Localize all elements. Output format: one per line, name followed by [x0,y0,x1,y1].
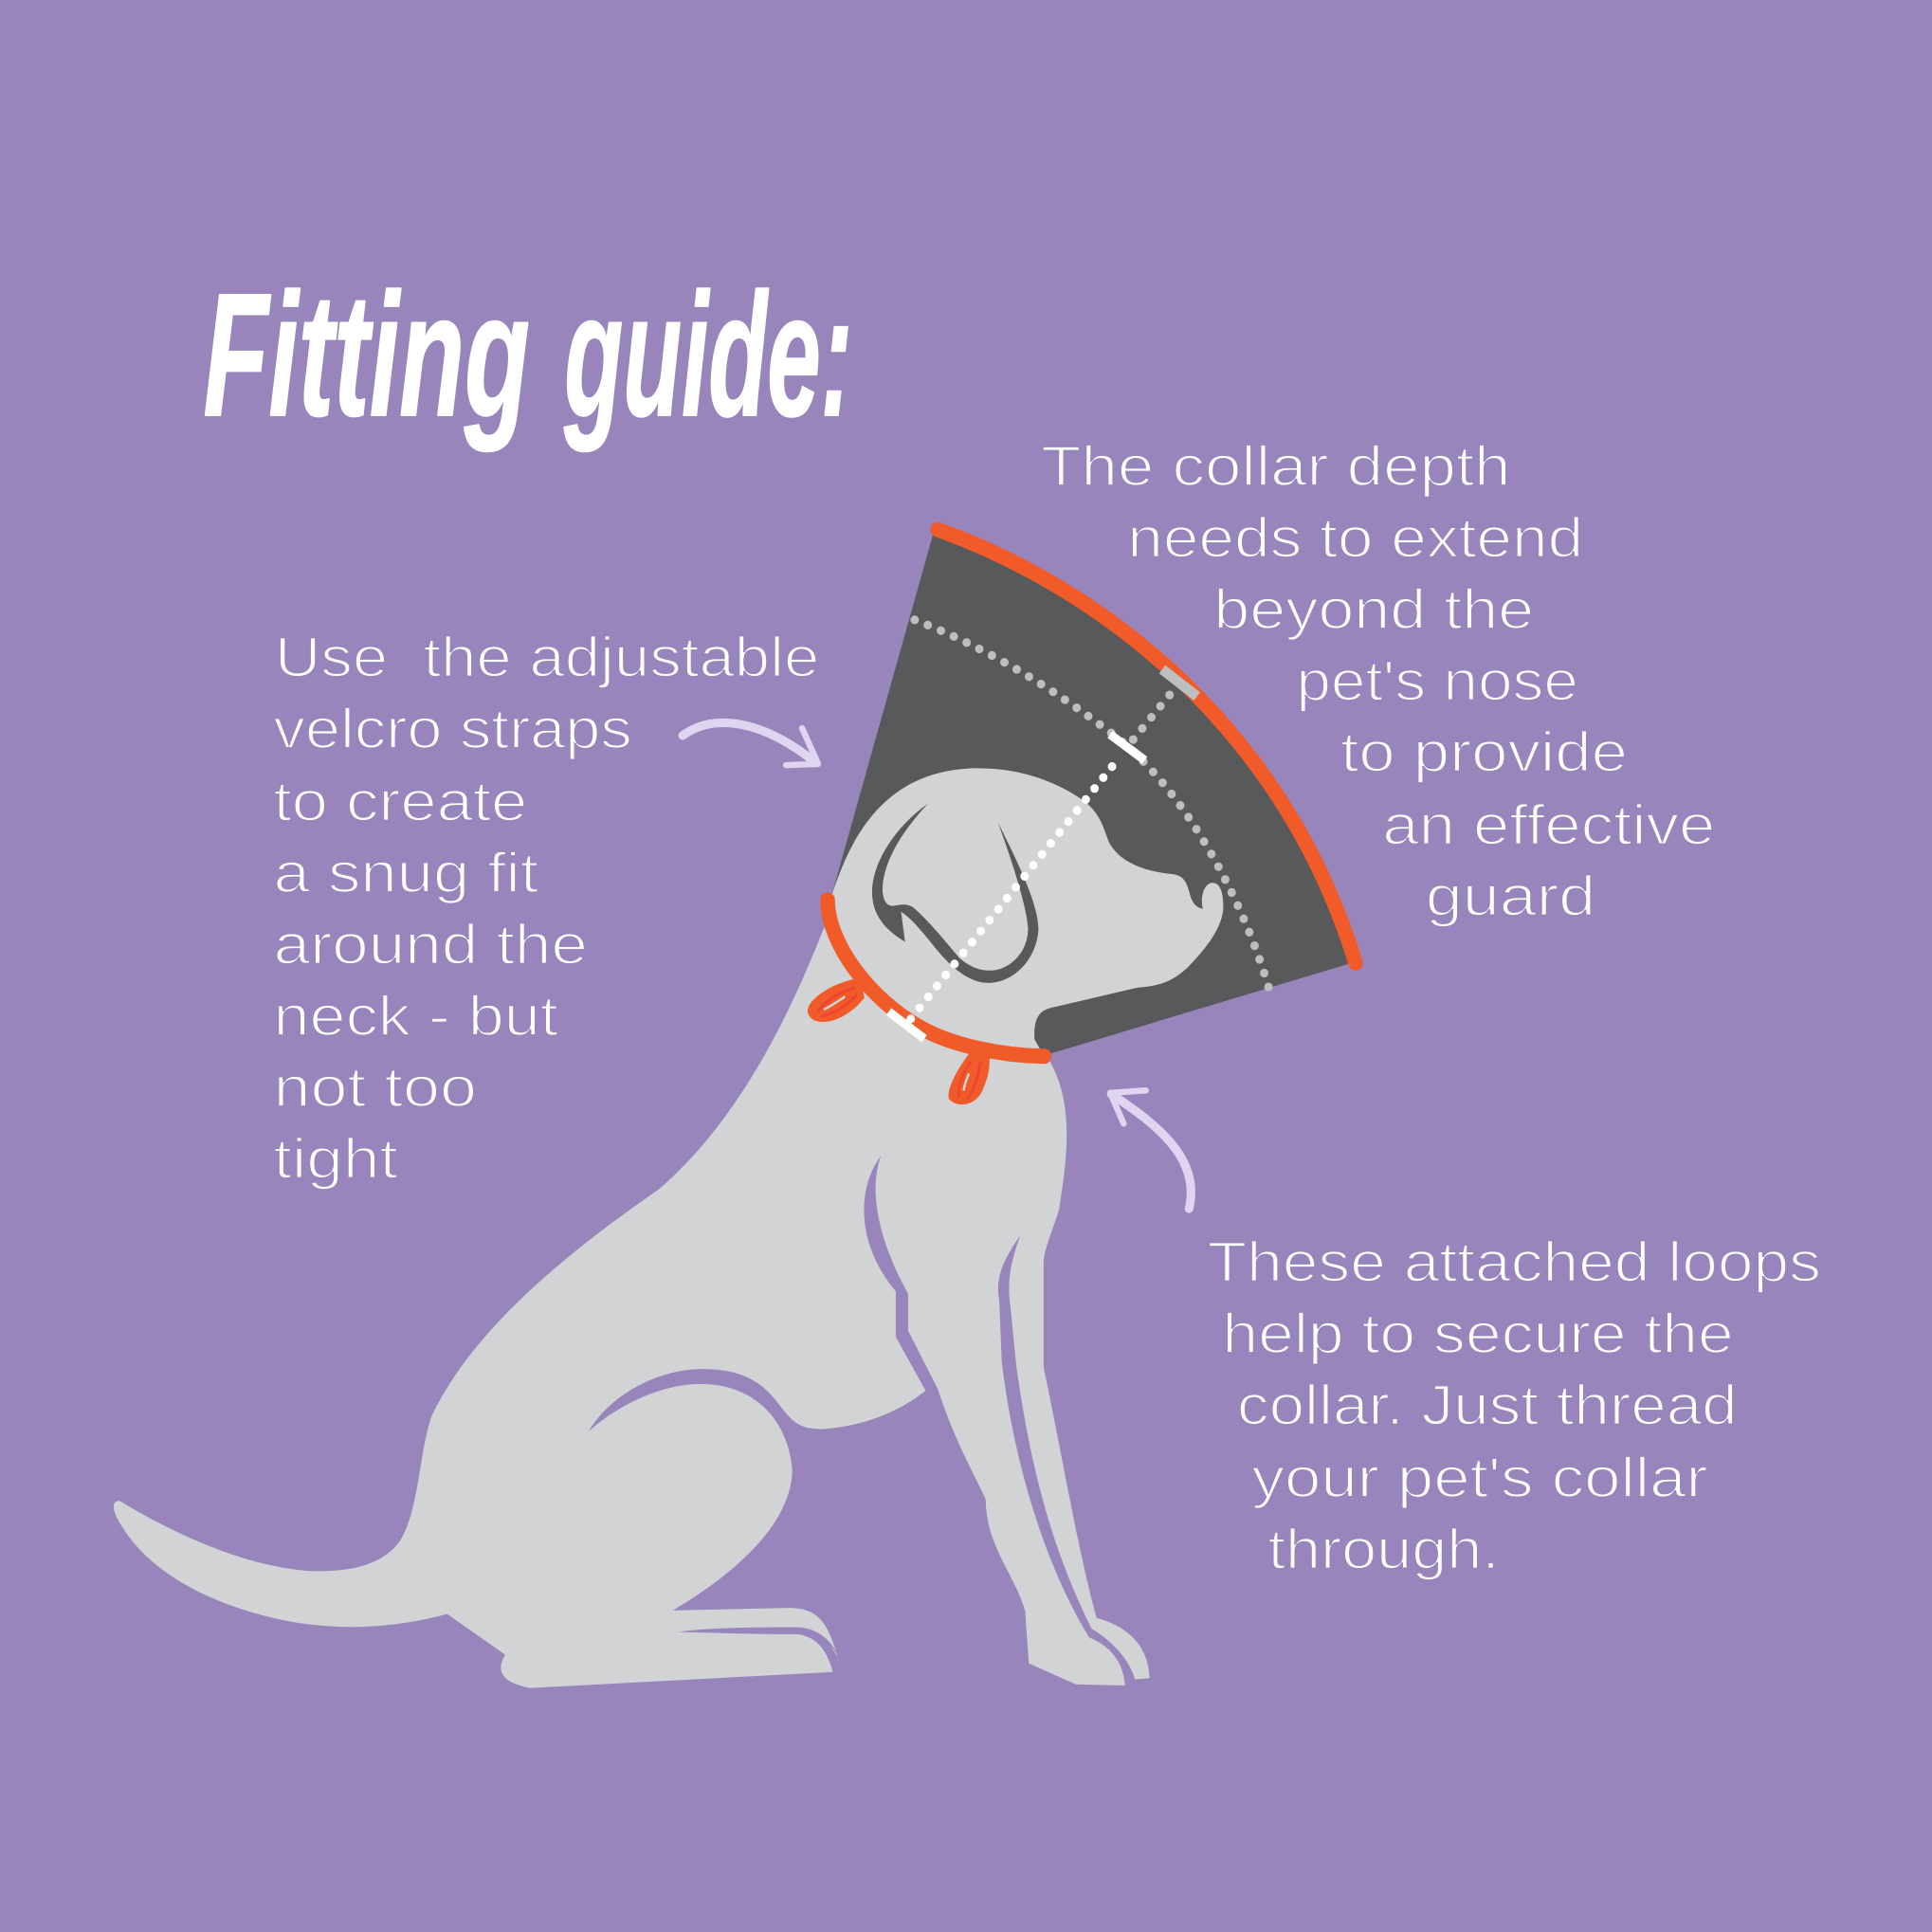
dotted guide: head length [911,759,1118,1019]
cone rim [938,530,1356,963]
text block: attached loops [1208,1230,1821,1581]
arrow: to velcro straps [683,722,818,765]
collar band [828,900,1045,1056]
hind foot slit [679,1628,839,1657]
dotted guide: beyond the nose [1133,695,1170,739]
cone [831,530,1356,1055]
body details [589,1156,1135,1686]
text block: attached loops: your pet's collar [1252,1446,1707,1509]
text block: attached loops: These attached loops [1208,1230,1821,1294]
title: guide: [564,258,852,453]
loop: bottom [949,1051,990,1104]
loop: left [808,977,865,1022]
text block: velcro straps: a snug fit [274,841,538,904]
dog head [828,768,1223,1056]
text block: attached loops: help to secure the [1222,1302,1734,1365]
text block: velcro straps: velcro straps [274,697,632,760]
text block: velcro straps: Use the adjustable [275,626,819,689]
text block: collar depth: guard [1426,865,1595,928]
head depth marker [1110,735,1145,760]
dog body [114,918,1150,1688]
chest slit [864,1156,938,1393]
arrow: to attached loops [1110,1090,1191,1209]
leg slit [998,1236,1135,1686]
text block: collar depth: The collar depth [1041,434,1510,498]
text block: velcro straps: not too [274,1055,477,1119]
title: Fitting [203,258,530,453]
text block: collar depth: pet's nose [1296,648,1578,712]
rim marker [1162,669,1197,697]
text block: velcro straps [274,626,819,1191]
thigh crescent [589,1369,818,1469]
text block: collar depth [1041,434,1715,928]
text block: attached loops: collar. Just thread [1237,1374,1738,1437]
text block: velcro straps: tight [274,1127,398,1191]
text block: collar depth: to provide [1340,720,1628,784]
text block: attached loops: through. [1267,1518,1500,1581]
text block: collar depth: needs to extend [1127,505,1583,569]
neck marker [889,1012,924,1039]
text block: velcro straps: to create [274,770,527,833]
text block: collar depth: an effective [1382,793,1715,856]
dog ear [872,803,1038,983]
dotted guide: collar depth arc [915,620,1269,990]
text block: collar depth: beyond the [1213,577,1534,641]
text block: velcro straps: neck - but [274,984,558,1048]
text block: velcro straps: around the [274,912,588,975]
head, collar and straps [808,695,1223,1104]
